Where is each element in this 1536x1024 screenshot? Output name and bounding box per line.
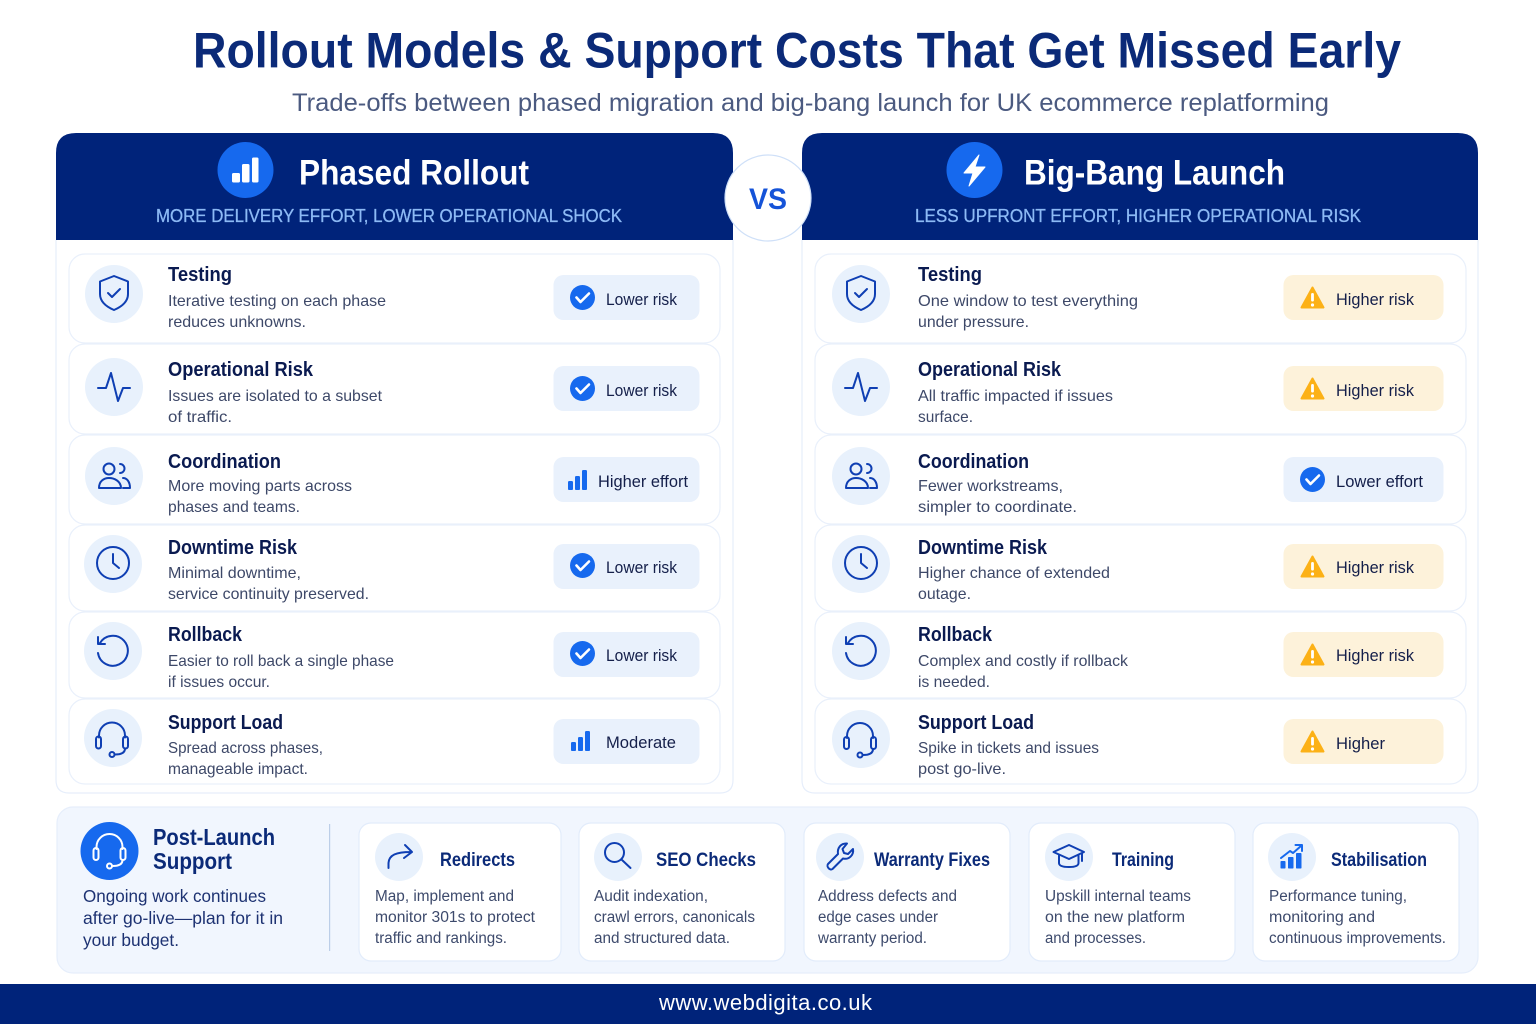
- row text: [168, 537, 369, 603]
- subtitle: Trade-offs between phased migration and big-bang launch for UK ecommerce replatforming: [292, 89, 1329, 117]
- card text: Upskill internal teams: [1045, 888, 1191, 905]
- badge: higher risk: Higher risk: [1336, 381, 1414, 400]
- row text: Operational Risk: [168, 359, 314, 381]
- row: support load: [69, 699, 720, 784]
- heading: phased rollout: Phased Rollout: [299, 154, 529, 192]
- row text: Operational Risk: [918, 359, 1062, 381]
- row text: [918, 624, 1129, 691]
- row text: reduces unknowns.: [168, 314, 306, 331]
- badge: higher: [1284, 719, 1444, 764]
- badge: higher effort: [554, 457, 700, 502]
- badge: lower risk: [554, 632, 700, 677]
- card text: Performance tuning,: [1269, 888, 1407, 905]
- tagline: phased rollout: MORE DELIVERY EFFORT, LOWER OPERATIONAL SHOCK: [156, 206, 622, 226]
- row: coordination: [69, 435, 720, 524]
- row text: More moving parts across: [168, 478, 352, 495]
- row text: of traffic.: [168, 409, 232, 426]
- row text: Downtime Risk: [168, 537, 298, 559]
- row text: Spread across phases,: [168, 740, 323, 757]
- badge: lower risk: Lower risk: [606, 646, 677, 665]
- row text: [168, 264, 386, 331]
- card: stabilisation: [1253, 823, 1459, 961]
- card: seo checks: [579, 823, 785, 961]
- row text: Minimal downtime,: [168, 565, 301, 582]
- card text: Map, implement and: [375, 888, 514, 905]
- row text: [168, 712, 323, 778]
- badge: higher effort: Higher effort: [598, 472, 688, 491]
- row text: Fewer workstreams,: [918, 478, 1063, 495]
- badge: moderate: Moderate: [606, 733, 676, 752]
- row text: manageable impact.: [168, 761, 308, 778]
- row: rollback: [69, 612, 720, 698]
- card: warranty fixes: [804, 823, 1010, 961]
- icon: rollback arrow: [84, 622, 142, 680]
- row text: simpler to coordinate.: [918, 499, 1077, 516]
- badge: lower risk: [554, 366, 700, 411]
- row text: [918, 537, 1110, 603]
- row text: [168, 451, 352, 516]
- icon: shield: [85, 265, 143, 323]
- badge: lower effort: [1284, 457, 1444, 502]
- tagline: big-bang launch: LESS UPFRONT EFFORT, HIGHER OPERATIONAL RISK: [915, 206, 1361, 226]
- row text: Downtime Risk: [918, 537, 1048, 559]
- panel header: phased rollout: [56, 133, 733, 240]
- panel: post-launch support: [57, 807, 1478, 973]
- row text: Complex and costly if rollback: [918, 653, 1129, 670]
- card title: Training: [1112, 850, 1174, 871]
- icon: bar chart: [218, 142, 274, 198]
- card title: Warranty Fixes: [874, 850, 990, 871]
- icon: people: [832, 447, 890, 505]
- icon: pulse: [85, 358, 143, 416]
- badge: VS: VS: [749, 183, 787, 216]
- icon: people: [85, 447, 143, 505]
- icon: clock: [84, 535, 142, 593]
- description: Ongoing work continues: [83, 886, 266, 906]
- title: Rollout Models & Support Costs That Get Missed Early: [193, 22, 1401, 78]
- description: your budget.: [83, 930, 179, 950]
- row text: Higher chance of extended: [918, 565, 1110, 582]
- row text: is needed.: [918, 674, 990, 691]
- row text: if issues occur.: [168, 674, 270, 691]
- card text: [1269, 888, 1446, 947]
- icon: magnifier: [594, 833, 642, 881]
- icon: growth chart: [1268, 833, 1316, 881]
- row text: [918, 264, 1138, 331]
- row: support load: [815, 699, 1466, 784]
- card text: traffic and rankings.: [375, 930, 507, 947]
- row: operational risk: [69, 344, 720, 434]
- row text: surface.: [918, 409, 973, 426]
- panel: phased rollout: [56, 133, 733, 793]
- row text: Rollback: [168, 624, 243, 646]
- row text: Coordination: [918, 451, 1029, 473]
- card text: continuous improvements.: [1269, 930, 1446, 947]
- badge: higher: Higher: [1336, 734, 1385, 753]
- card text: and processes.: [1045, 930, 1146, 947]
- card text: [594, 888, 755, 947]
- card title: Stabilisation: [1331, 850, 1427, 871]
- badge: higher risk: Higher risk: [1336, 646, 1414, 665]
- row text: Support Load: [918, 712, 1034, 734]
- card: redirects: [359, 823, 561, 961]
- card text: monitor 301s to protect: [375, 909, 536, 926]
- row text: Rollback: [918, 624, 993, 646]
- card: training: [1029, 823, 1235, 961]
- row text: Iterative testing on each phase: [168, 293, 386, 310]
- row text: Spike in tickets and issues: [918, 740, 1099, 757]
- badge: higher risk: Higher risk: [1336, 558, 1414, 577]
- panel header: big-bang launch: [802, 133, 1478, 240]
- row text: outage.: [918, 586, 971, 603]
- badge: lower risk: [554, 275, 700, 320]
- row text: phases and teams.: [168, 499, 300, 516]
- badge: moderate: [554, 719, 700, 764]
- icon: shield: [832, 265, 890, 323]
- row text: under pressure.: [918, 314, 1029, 331]
- row: coordination: [815, 435, 1466, 524]
- icon: wrench: [816, 833, 864, 881]
- card text: [375, 888, 536, 947]
- row text: One window to test everything: [918, 293, 1138, 310]
- row text: Coordination: [168, 451, 281, 473]
- row text: [918, 451, 1077, 516]
- badge: lower risk: [554, 544, 700, 589]
- post-launch intro: [80, 822, 283, 950]
- row text: Testing: [168, 264, 232, 286]
- heading: big-bang launch: Big-Bang Launch: [1024, 154, 1285, 192]
- card text: [1045, 888, 1191, 947]
- icon: headset: [80, 822, 138, 880]
- icon: graduation cap: [1045, 833, 1093, 881]
- row text: [168, 359, 383, 426]
- card title: SEO Checks: [656, 850, 756, 871]
- badge: lower risk: Lower risk: [606, 381, 677, 400]
- card text: edge cases under: [818, 909, 938, 926]
- card text: Audit indexation,: [594, 888, 708, 905]
- row: downtime risk: [69, 525, 720, 611]
- badge: higher risk: Higher risk: [1336, 290, 1414, 309]
- row text: [168, 624, 394, 691]
- badge: higher risk: [1284, 544, 1444, 589]
- heading: post-launch support: Support: [153, 848, 232, 874]
- row text: Support Load: [168, 712, 283, 734]
- row: testing: [815, 254, 1466, 343]
- heading: post-launch support: Post-Launch: [153, 824, 275, 850]
- badge: higher risk: [1284, 275, 1444, 320]
- icon: redirect arrow: [375, 833, 423, 881]
- card text: Address defects and: [818, 888, 957, 905]
- card text: crawl errors, canonicals: [594, 909, 755, 926]
- description: [83, 886, 283, 950]
- row text: [918, 712, 1099, 778]
- row: operational risk: [815, 344, 1466, 434]
- card text: [817, 888, 957, 947]
- card title: Redirects: [440, 850, 515, 871]
- badge: higher risk: [1284, 366, 1444, 411]
- icon: headset: [832, 710, 890, 768]
- card text: on the new platform: [1045, 909, 1185, 926]
- panel: big-bang launch: [802, 133, 1478, 793]
- badge: lower effort: Lower effort: [1336, 472, 1423, 491]
- row text: service continuity preserved.: [168, 586, 369, 603]
- row text: Easier to roll back a single phase: [168, 653, 394, 670]
- icon: headset: [84, 709, 142, 767]
- footer url: www.webdigita.co.uk: [658, 990, 873, 1015]
- row: downtime risk: [815, 525, 1466, 611]
- icon: pulse: [832, 358, 890, 416]
- badge: VS: [725, 155, 811, 241]
- description: after go-live—plan for it in: [83, 908, 283, 928]
- badge: lower risk: Lower risk: [606, 558, 677, 577]
- row text: Issues are isolated to a subset: [168, 388, 383, 405]
- footer bar: [0, 984, 1536, 1024]
- badge: higher risk: [1284, 632, 1444, 677]
- badge: lower risk: Lower risk: [606, 290, 677, 309]
- icon: clock: [832, 535, 890, 593]
- row text: post go-live.: [918, 761, 1006, 778]
- row text: All traffic impacted if issues: [918, 388, 1113, 405]
- card text: and structured data.: [594, 930, 730, 947]
- row text: [918, 359, 1113, 426]
- card text: warranty period.: [817, 930, 927, 947]
- icon: rollback arrow: [832, 622, 890, 680]
- icon: lightning bolt: [946, 142, 1002, 198]
- card text: monitoring and: [1269, 909, 1375, 926]
- row: rollback: [815, 612, 1466, 698]
- row text: Testing: [918, 264, 982, 286]
- row: testing: [69, 254, 720, 343]
